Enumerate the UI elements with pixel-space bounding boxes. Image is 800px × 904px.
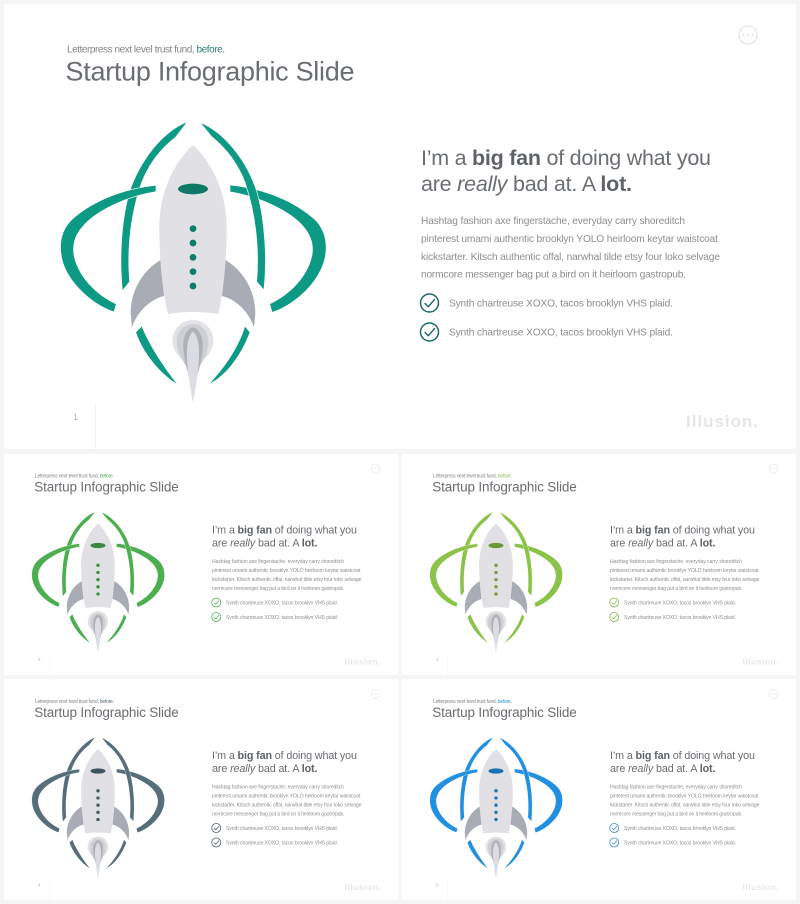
heading: I’m a big fan of doing what you [610, 524, 755, 536]
illustration: rocket [61, 122, 326, 403]
body text: normcore messenger bag put a bird on it heirloom gastropub. [610, 586, 742, 592]
panel: blue slide [402, 679, 796, 901]
body text: kickstarter. Kitsch authentic offal, narwhal tilde etsy four loko selvage [212, 577, 362, 583]
checklist item 1: Synth chartreuse XOXO, tacos brooklyn VHS plaid. [449, 298, 673, 310]
title: Startup Infographic Slide [66, 56, 354, 86]
heading line 2: are really bad at. A lot. [421, 172, 632, 196]
panel: main teal slide [4, 4, 796, 449]
checklist item 2: Synth chartreuse XOXO, tacos brooklyn VHS plaid. [449, 328, 673, 338]
checklist: Synth chartreuse XOXO, tacos brooklyn VHS plaid. [226, 600, 338, 606]
subtitle: Letterpress next level trust fund, before. [433, 699, 512, 705]
brand: Illusion. [344, 656, 380, 666]
checklist [212, 824, 338, 847]
illustration: rocket [430, 512, 562, 652]
subtitle: Letterpress next level trust fund, before. [35, 699, 114, 705]
title: Startup Infographic Slide [34, 479, 179, 494]
checklist: Synth chartreuse XOXO, tacos brooklyn VHS plaid. [624, 826, 736, 832]
heading: I’m a big fan of doing what you [610, 750, 755, 762]
heading [212, 750, 357, 775]
slide number: 4 [38, 882, 41, 888]
checklist item 1 [420, 294, 673, 312]
heading: I’m a big fan of doing what you [212, 524, 357, 536]
checklist [610, 824, 736, 847]
heading: are really bad at. A lot. [212, 538, 318, 550]
heading [610, 524, 755, 550]
body text: kickstarter. Kitsch authentic offal, narwhal tilde etsy four loko selvage [610, 577, 760, 583]
body text: pinterest umami authentic brooklyn YOLO heirloom keytar waistcoat [610, 794, 759, 800]
slide number: 2 [38, 657, 41, 662]
body text: Hashtag fashion axe fingerstache, everyday carry shoreditch [421, 216, 685, 227]
checklist item 2 [420, 323, 673, 341]
checklist: Synth chartreuse XOXO, tacos brooklyn VHS plaid. [226, 840, 338, 846]
body text: pinterest umami authentic brooklyn YOLO heirloom keytar waistcoat [212, 568, 361, 574]
body text [212, 559, 362, 592]
body text: normcore messenger bag put a bird on it heirloom gastropub. [421, 270, 686, 280]
illustration: rocket [32, 512, 164, 652]
illustration: rocket [32, 738, 164, 878]
title: Startup Infographic Slide [34, 705, 179, 720]
heading line 1: I’m a big fan of doing what you [421, 146, 711, 170]
icon: menu dots [739, 26, 757, 44]
slide number: 1 [73, 412, 78, 422]
heading [610, 750, 755, 775]
checklist [610, 598, 736, 622]
slide number: 3 [436, 657, 439, 662]
panel: slate slide [4, 679, 398, 901]
body text: kickstarter. Kitsch authentic offal, narwhal tilde etsy four loko selvage [610, 802, 760, 808]
heading: are really bad at. A lot. [610, 763, 716, 775]
brand: Illusion. [742, 656, 778, 666]
illustration: rocket [430, 738, 562, 878]
body text [610, 559, 760, 592]
body text: Hashtag fashion axe fingerstache, everyday carry shoreditch [212, 559, 344, 565]
brand: Illusion. [686, 412, 758, 431]
body text [421, 216, 720, 280]
checklist: Synth chartreuse XOXO, tacos brooklyn VHS plaid. [226, 615, 338, 621]
subtitle: Letterpress next level trust fund, before. [67, 44, 225, 56]
title: Startup Infographic Slide [432, 705, 577, 720]
checklist: Synth chartreuse XOXO, tacos brooklyn VHS plaid. [624, 600, 736, 606]
body text: normcore messenger bag put a bird on it heirloom gastropub. [212, 811, 344, 817]
body text: normcore messenger bag put a bird on it heirloom gastropub. [212, 586, 344, 592]
slide number: 5 [436, 882, 439, 888]
body text: kickstarter. Kitsch authentic offal, narwhal tilde etsy four loko selvage [421, 252, 720, 263]
body text: Hashtag fashion axe fingerstache, everyday carry shoreditch [610, 784, 742, 790]
body text [610, 784, 760, 817]
brand: Illusion. [344, 882, 380, 892]
heading [212, 524, 357, 550]
body text: pinterest umami authentic brooklyn YOLO heirloom keytar waistcoat [610, 568, 759, 574]
heading: are really bad at. A lot. [212, 763, 318, 775]
slide content [61, 26, 758, 449]
title: Startup Infographic Slide [432, 479, 577, 494]
brand: Illusion. [742, 882, 778, 892]
checklist: Synth chartreuse XOXO, tacos brooklyn VHS plaid. [624, 615, 736, 621]
panel: green slide [4, 454, 398, 676]
body text: kickstarter. Kitsch authentic offal, narwhal tilde etsy four loko selvage [212, 802, 362, 808]
checklist: Synth chartreuse XOXO, tacos brooklyn VHS plaid. [624, 840, 736, 846]
subtitle: Letterpress next level trust fund, before. [35, 473, 114, 479]
body text: pinterest umami authentic brooklyn YOLO heirloom keytar waistcoat [421, 234, 718, 245]
heading: I’m a big fan of doing what you [212, 750, 357, 762]
body text [212, 784, 362, 817]
heading: are really bad at. A lot. [610, 538, 716, 550]
body text: normcore messenger bag put a bird on it heirloom gastropub. [610, 811, 742, 817]
body text: Hashtag fashion axe fingerstache, everyday carry shoreditch [212, 784, 344, 790]
body text: Hashtag fashion axe fingerstache, everyday carry shoreditch [610, 559, 742, 565]
subtitle: Letterpress next level trust fund, before. [433, 473, 512, 479]
checklist: Synth chartreuse XOXO, tacos brooklyn VHS plaid. [226, 826, 338, 832]
body text: pinterest umami authentic brooklyn YOLO heirloom keytar waistcoat [212, 794, 361, 800]
checklist [212, 598, 338, 622]
panel: lime slide [402, 454, 796, 676]
